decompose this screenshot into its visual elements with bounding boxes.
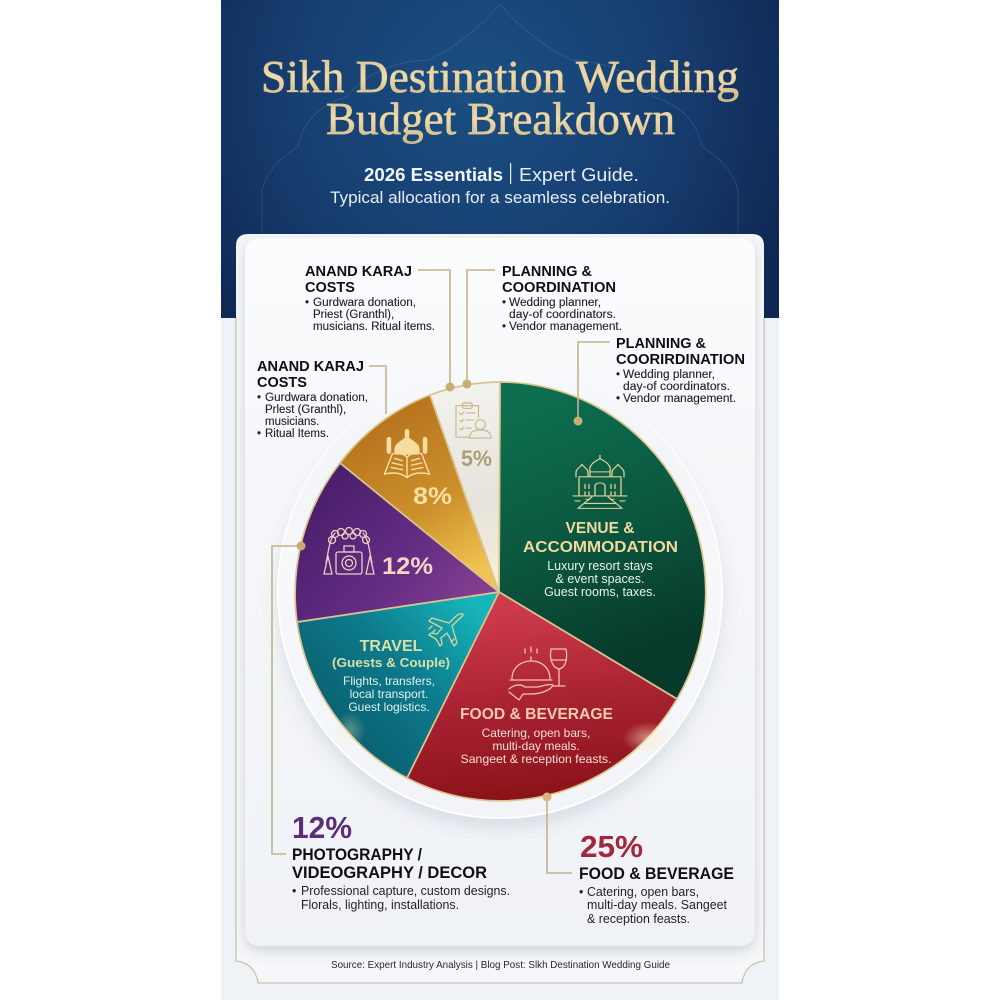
callout: anand karaj top: Gurdwara donation, — [313, 297, 416, 309]
callout: planning right: COORIRDINATION — [616, 352, 745, 368]
pie halo — [278, 366, 722, 818]
icon: photo arch and camera — [324, 528, 374, 574]
travel text: Flights, transfers, — [343, 674, 435, 688]
arch outline decoration — [262, 4, 738, 234]
callout: anand karaj left: musicians. — [265, 416, 319, 428]
value: 8% in pie: 8% — [413, 483, 452, 510]
callout: planning top: Vendor management. — [509, 321, 622, 333]
venue text: Luxury resort stays — [547, 559, 653, 573]
travel text: local transport. — [350, 687, 428, 701]
callout: planning right: Vendor management. — [623, 393, 736, 405]
slice: anand karaj 8% — [340, 395, 499, 592]
callout: anand karaj left: ANAND KARAJ — [257, 359, 364, 375]
subtitle — [330, 163, 670, 207]
icon: clipboard planner — [456, 403, 491, 438]
food text: Sangeet & reception feasts. — [460, 752, 612, 766]
travel text — [332, 638, 450, 714]
outer frame — [236, 234, 764, 983]
slice: planning 5% — [430, 382, 500, 592]
callout: planning right — [574, 336, 745, 426]
callout: food and beverage: 25% — [580, 829, 643, 864]
callout: anand karaj left: COSTS — [257, 375, 307, 391]
rim glints — [334, 712, 674, 754]
venue text — [523, 520, 678, 599]
callout: anand karaj left: Prlest (Granthl), — [265, 404, 346, 416]
icon: plane — [429, 614, 463, 646]
callout: planning top — [462, 264, 622, 388]
callout: anand karaj left — [257, 359, 386, 440]
callout: food and beverage: FOOD & BEVERAGE — [579, 864, 734, 883]
callout: anand karaj top: Priest (Granthl), — [313, 309, 394, 321]
callout: photography: PHOTOGRAPHY / — [292, 845, 422, 864]
callout: food and beverage: & reception feasts. — [587, 912, 690, 926]
food text: Catering, open bars, — [482, 726, 590, 740]
callout: anand karaj left: • — [257, 428, 261, 440]
callout: anand karaj top — [305, 264, 454, 392]
title: Budget Breakdown — [326, 94, 675, 144]
main card — [245, 238, 755, 946]
value: 5% in pie: 5% — [461, 446, 492, 471]
callout: planning right: Wedding planner, — [623, 369, 715, 381]
value: 12% in pie: 12% — [382, 553, 433, 580]
callout: planning top: • — [502, 297, 506, 309]
callout: planning top: PLANNING & — [502, 264, 593, 280]
food text — [460, 706, 613, 766]
slice: photography 12% — [295, 463, 499, 622]
travel text: TRAVEL — [360, 638, 423, 655]
callout: planning top: COORDINATION — [502, 280, 616, 296]
callout: planning right: day-of coordinators. — [623, 381, 730, 393]
travel text: (Guests & Couple) — [332, 656, 450, 670]
food text: multi-day meals. — [492, 739, 580, 753]
callout: food and beverage: multi-day meals. Sangeet — [587, 898, 728, 912]
frame line — [236, 318, 764, 983]
source line: Source: Expert Industry Analysis | Blog Post: Slkh Destination Wedding Guide — [331, 959, 670, 971]
callout: food and beverage: • — [579, 885, 583, 899]
callout: photography: • — [292, 884, 296, 898]
callout: photography: Professional capture, custom designs. — [301, 884, 510, 898]
callout: planning top: • — [502, 321, 506, 333]
callout: planning right: PLANNING & — [616, 336, 707, 352]
callout: anand karaj top: musicians. Ritual items. — [313, 321, 435, 333]
callout: photography: Florals, lighting, installations. — [301, 898, 459, 912]
callout: anand karaj left: Ritual Items. — [265, 428, 329, 440]
callout: anand karaj left: Gurdwara donation, — [265, 392, 368, 404]
travel text: Guest logistics. — [348, 700, 430, 714]
callout: food and beverage: Catering, open bars, — [587, 885, 699, 899]
callout: planning right: • — [616, 369, 620, 381]
column background — [221, 318, 779, 1000]
slice: venue 38% — [499, 382, 706, 699]
subtitle: Typical allocation for a seamless celebration. — [330, 189, 670, 207]
subtitle: Expert Guide. — [519, 165, 639, 185]
header band — [221, 0, 779, 318]
title — [261, 52, 739, 144]
callout: anand karaj left: • — [257, 392, 261, 404]
venue text: ACCOMMODATION — [523, 539, 678, 556]
slice: travel — [297, 592, 499, 778]
food text: FOOD & BEVERAGE — [460, 706, 613, 723]
callout: planning top: Wedding planner, — [509, 297, 601, 309]
icon: venue palace — [573, 455, 627, 508]
callout: planning right: • — [616, 393, 620, 405]
icon: mosque and book — [384, 431, 430, 478]
callout: food and beverage — [542, 792, 734, 926]
callout: anand karaj top: • — [305, 297, 309, 309]
callout: photography: VIDEOGRAPHY / DECOR — [292, 863, 487, 882]
slice: food 25% — [407, 592, 677, 801]
pie chart — [295, 382, 706, 801]
callout: planning top: day-of coordinators. — [509, 309, 616, 321]
venue text: VENUE & — [566, 520, 634, 537]
callout: anand karaj top: COSTS — [305, 280, 355, 296]
callout: photography: 12% — [292, 810, 352, 845]
icon: food cloche and wine — [509, 647, 567, 700]
title: Sikh Destination Wedding — [261, 52, 739, 102]
venue text: & event spaces. — [556, 572, 644, 586]
subtitle: 2026 Essentials — [364, 165, 503, 185]
callout: anand karaj top: ANAND KARAJ — [305, 264, 412, 280]
venue text: Guest rooms, taxes. — [544, 585, 656, 599]
callout: photography — [272, 542, 510, 912]
